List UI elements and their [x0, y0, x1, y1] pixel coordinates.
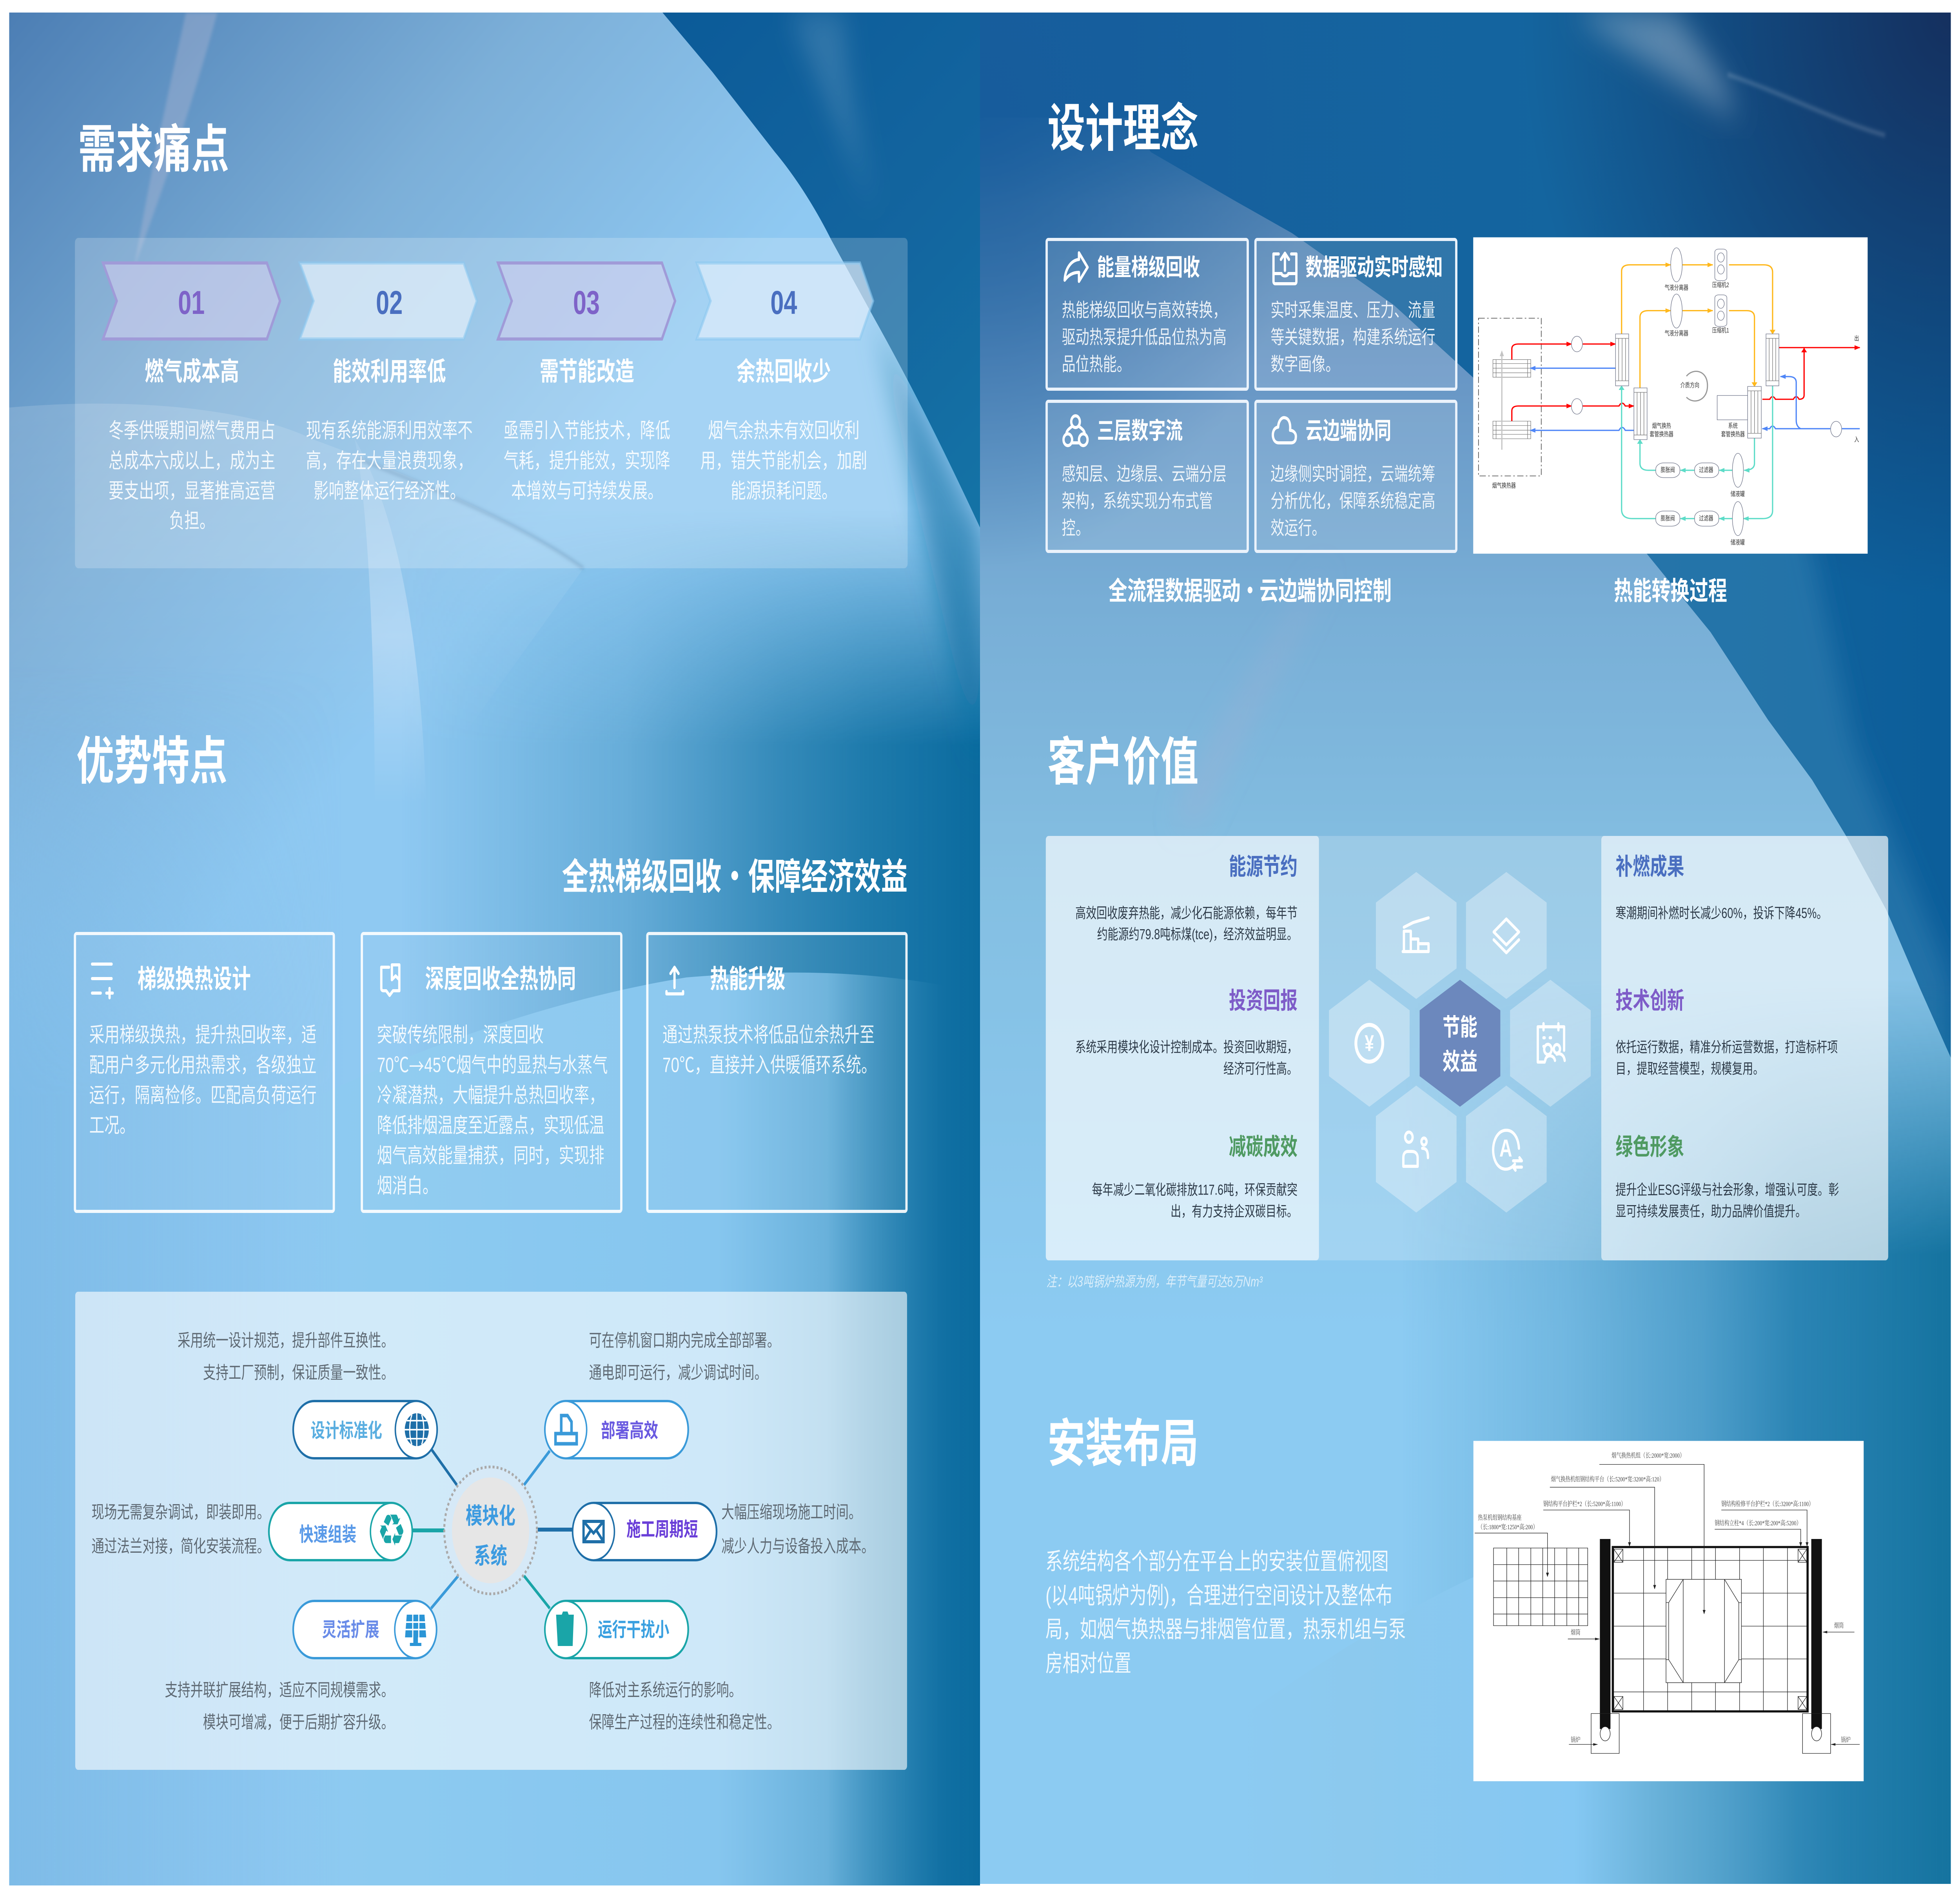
card: 三层数字流: 控。 — [1062, 517, 1089, 538]
pain point 03 — [498, 263, 675, 502]
right column: 技术创新 — [1615, 988, 1684, 1014]
pain point 02: 影响整体运行经济性。 — [314, 479, 465, 502]
node: 快速组装 — [92, 1503, 412, 1560]
node: 设计标准化: 设计标准化 — [310, 1420, 382, 1442]
icon: three layers — [1063, 416, 1087, 446]
pain point 04 — [697, 263, 873, 502]
title: 安装布局: 安装布局 — [1047, 1415, 1198, 1473]
left column: 约能源约79.8吨标煤(tce)，经济效益明显。 — [1097, 926, 1298, 943]
pain point 01: 总成本六成以上，成为主 — [109, 449, 275, 472]
card: 深度回收全热协同: 70℃→45℃烟气中的显热与水蒸气 — [377, 1050, 608, 1080]
connectors — [413, 1450, 573, 1608]
card: 数据驱动实时感知: 数字画像。 — [1270, 353, 1339, 375]
icon: document tray — [555, 1416, 577, 1444]
card: 云边端协同: 云边端协同 — [1305, 418, 1391, 444]
text block: installation: 局，如烟气换热器与排烟管位置，热泵机组与泵 — [1045, 1616, 1406, 1643]
icon: cloud — [1273, 418, 1296, 443]
diagram: installation plan view: 钢结构检修平台护栏*2（长:3200*高:1100） — [1721, 1500, 1813, 1508]
icon: inbox upload — [1274, 253, 1296, 284]
node: 设计标准化: 采用统一设计规范，提升部件互换性。 — [178, 1331, 394, 1351]
pain point 02: 02 — [376, 284, 403, 321]
right column: 目，提取经营模型，规模复用。 — [1615, 1060, 1764, 1077]
pain point 01: 负担。 — [169, 509, 215, 532]
card: 深度回收全热协同: 深度回收全热协同 — [425, 965, 576, 994]
pain point 04: 余热回收少 — [737, 357, 831, 386]
right column: 显可持续发展责任，助力品牌价值提升。 — [1615, 1203, 1806, 1220]
diagram: heat conversion process: 介质方向 — [1681, 382, 1699, 389]
left column: 高效回收废弃热能，减少化石能源依赖，每年节 — [1075, 905, 1298, 921]
pain point 02 — [300, 263, 477, 502]
node: 灵活扩展: 模块可增减，便于后期扩容升级。 — [203, 1713, 394, 1732]
panel: pain points — [75, 238, 907, 568]
pain point 04: 烟气余热未有效回收利 — [708, 419, 860, 442]
card: 能量梯级回收: 品位热能。 — [1062, 353, 1131, 375]
left column — [1046, 836, 1319, 1260]
icon: bookmark bubble — [381, 965, 399, 995]
node: 灵活扩展: 支持并联扩展结构，适应不同规模需求。 — [165, 1680, 394, 1700]
hexagon: language: A — [1499, 1135, 1512, 1162]
pain point 01: 燃气成本高 — [145, 357, 239, 386]
card: 能量梯级回收: 驱动热泵提升低品位热为高 — [1062, 326, 1227, 348]
icon: solar panel — [405, 1615, 426, 1646]
hexagon: language — [1466, 1086, 1547, 1213]
card: 深度回收全热协同: 烟消白。 — [377, 1174, 437, 1197]
diagram: heat conversion process: 烟气换热器 — [1492, 482, 1516, 489]
diagram: installation plan view: 钢结构平台护栏*2（长:5200*高:1100） — [1543, 1500, 1626, 1508]
node: 部署高效: 部署高效 — [601, 1420, 658, 1442]
subtitle: advantages: 全热梯级回收・保障经济效益 — [562, 857, 907, 897]
diagram: heat conversion process: 储液罐 — [1731, 490, 1745, 498]
diagram: installation plan view: 烟气换热机组（长:2000*宽:2000） — [1612, 1451, 1684, 1459]
icon: trash bin — [556, 1612, 574, 1646]
node: 运行干扰小 — [545, 1601, 780, 1732]
diagram: heat conversion process: 套管换热器 — [1721, 431, 1745, 438]
node: 运行干扰小: 降低对主系统运行的影响。 — [589, 1680, 742, 1700]
left column: 经济可行性高。 — [1223, 1060, 1298, 1077]
text block: installation — [1045, 1548, 1406, 1677]
card: 数据驱动实时感知 — [1256, 239, 1456, 389]
diagram: heat conversion process: 压缩机2 — [1712, 281, 1729, 289]
hexagon: center — [1420, 980, 1500, 1107]
text block: installation: 系统结构各个部分在平台上的安装位置俯视图 — [1045, 1548, 1389, 1575]
node: 设计标准化: 支持工厂预制，保证质量一致性。 — [203, 1363, 394, 1383]
diagram: heat conversion process: 出 — [1854, 335, 1859, 343]
text block: installation: (以4吨锅炉为例)，合理进行空间设计及整体布 — [1045, 1583, 1392, 1609]
card: 云边端协同: 分析优化，保障系统稳定高 — [1270, 490, 1436, 511]
card: 深度回收全热协同: 降低排烟温度至近露点，实现低温 — [377, 1113, 604, 1137]
hexagon: chart — [1376, 872, 1457, 999]
card: 能量梯级回收: 热能梯级回收与高效转换， — [1062, 299, 1227, 321]
caption: design concept: 全流程数据驱动・云边端协同控制 — [1109, 577, 1392, 606]
diagram: installation plan view: 锅炉 — [1841, 1736, 1851, 1744]
pain point 03: 需节能改造 — [540, 357, 634, 386]
pain point 03: 气耗，提升能效，实现降 — [504, 449, 670, 472]
node: 施工周期短: 大幅压缩现场施工时间。 — [721, 1503, 861, 1522]
card: 梯级换热设计: 运行，隔离检修。匹配高负荷运行 — [89, 1083, 317, 1107]
diagram: installation plan view: 烟筒 — [1571, 1628, 1581, 1636]
icon: upload — [666, 967, 683, 994]
card: 云边端协同 — [1256, 401, 1456, 551]
icon: list plus — [92, 964, 113, 998]
hexagon: people — [1376, 1086, 1457, 1213]
text block: installation: 房相对位置 — [1045, 1650, 1131, 1677]
card: 梯级换热设计: 梯级换热设计 — [138, 965, 251, 994]
node: 施工周期短: 施工周期短 — [626, 1519, 698, 1541]
pain point 02: 能效利用率低 — [333, 357, 446, 386]
panel: customer value — [1046, 836, 1888, 1260]
pain point 04: 能源损耗问题。 — [731, 479, 837, 502]
hexagon: yen: ¥ — [1365, 1030, 1374, 1056]
pain point 04: 用，错失节能机会，加剧 — [701, 449, 867, 472]
pain point 01: 01 — [178, 284, 205, 321]
diagram: heat conversion process — [1473, 237, 1867, 554]
icon: globe — [405, 1413, 429, 1446]
right column: 补燃成果 — [1615, 854, 1684, 880]
hexagon: center: 效益 — [1443, 1049, 1477, 1075]
diagram: heat conversion process: 膨胀阀 — [1661, 515, 1675, 522]
node: 灵活扩展 — [165, 1601, 437, 1732]
card: 热能升级 — [647, 934, 906, 1211]
hexagon: center: 节能 — [1443, 1014, 1477, 1041]
hexagon: yen — [1329, 980, 1410, 1107]
card: 数据驱动实时感知: 数据驱动实时感知 — [1305, 254, 1443, 281]
diagram: heat conversion process: 烟气换热 — [1652, 422, 1671, 430]
node: 部署高效 — [545, 1331, 780, 1458]
card: 梯级换热设计: 配用户多元化用热需求，各级独立 — [89, 1053, 317, 1077]
right column: 绿色形象 — [1615, 1134, 1684, 1160]
footnote: 注：以3吨锅炉热源为例，年节气量可达6万Nm³ — [1046, 1273, 1263, 1290]
icon: share arrow — [1065, 253, 1087, 281]
right column: 依托运行数据，精准分析运营数据，打造标杆项 — [1615, 1039, 1838, 1055]
left column: 每年减少二氧化碳排放117.6吨，环保贡献突 — [1092, 1182, 1298, 1198]
node: 部署高效: 可在停机窗口期内完成全部部署。 — [589, 1331, 780, 1351]
diagram: heat conversion process: 气液分离器 — [1664, 284, 1688, 292]
node: 设计标准化 — [178, 1331, 437, 1458]
left column: 系统采用模块化设计控制成本。投资回收期短， — [1075, 1039, 1298, 1055]
card: 梯级换热设计 — [75, 934, 334, 1211]
pain point 02: 高，存在大量浪费现象， — [306, 449, 473, 472]
diagram: heat conversion process: 储液罐 — [1731, 539, 1745, 546]
card: 数据驱动实时感知: 实时采集温度、压力、流量 — [1270, 299, 1436, 321]
diagram: installation plan view: （长:1800*宽:1250*高:200） — [1478, 1523, 1538, 1531]
card: 深度回收全热协同: 烟气高效能量捕获，同时，实现排 — [377, 1144, 604, 1167]
card: 数据驱动实时感知: 等关键数据，构建系统运行 — [1270, 326, 1436, 348]
card: 三层数字流: 三层数字流 — [1097, 418, 1183, 444]
diagram: heat conversion process: 过滤器 — [1699, 515, 1713, 522]
card: 能量梯级回收 — [1047, 239, 1248, 389]
title: 客户价值: 客户价值 — [1047, 733, 1198, 791]
card: 三层数字流: 架构，系统实现分布式管 — [1062, 490, 1213, 511]
title: 设计理念: 设计理念 — [1047, 100, 1198, 158]
diagram: installation plan view: 钢结构立柱*4（长:200*宽:200*高:5200） — [1715, 1519, 1801, 1527]
diagram: installation plan view — [1474, 1441, 1864, 1781]
hexagon: building people — [1510, 980, 1591, 1107]
card: 深度回收全热协同: 突破传统限制，深度回收 — [377, 1023, 544, 1046]
node: 施工周期短: 减少人力与设备投入成本。 — [721, 1537, 874, 1556]
diagram: installation plan view: 烟筒 — [1834, 1621, 1844, 1630]
caption: heat conversion: 热能转换过程 — [1614, 577, 1727, 606]
card: 三层数字流 — [1047, 401, 1248, 551]
pain point 03: 03 — [573, 284, 600, 321]
card: 梯级换热设计: 采用梯级换热，提升热回收率，适 — [89, 1023, 317, 1046]
diagram: heat conversion process: 膨胀阀 — [1661, 466, 1675, 474]
card: 热能升级: 热能升级 — [710, 965, 786, 994]
card: 热能升级: 通过热泵技术将低品位余热升至 — [662, 1023, 875, 1046]
node: 运行干扰小: 运行干扰小 — [598, 1619, 670, 1641]
pain point 04: 04 — [770, 284, 797, 321]
pain point 02: 现有系统能源利用效率不 — [306, 419, 473, 442]
icon: envelope — [584, 1521, 604, 1542]
diagram: heat conversion process: 过滤器 — [1699, 466, 1713, 474]
left column: 投资回报 — [1229, 988, 1298, 1014]
card: 深度回收全热协同 — [362, 934, 621, 1211]
right column: 提升企业ESG评级与社会形象，增强认可度。彰 — [1615, 1182, 1839, 1198]
diagram: installation plan view: 热泵机组钢结构基座 — [1478, 1514, 1522, 1522]
card: 云边端协同: 效运行。 — [1270, 517, 1325, 538]
pain point 03: 本增效与可持续发展。 — [511, 479, 663, 502]
card: 能量梯级回收: 能量梯级回收 — [1097, 254, 1200, 281]
title: 优势特点: 优势特点 — [76, 732, 227, 790]
panel: modular system — [75, 1292, 907, 1770]
hexagon: layers — [1466, 872, 1547, 999]
node: 部署高效: 通电即可运行，减少调试时间。 — [589, 1363, 767, 1383]
card: 热能升级: 70℃，直接并入供暖循环系统。 — [662, 1053, 877, 1077]
left column: 出，有力支持企双碳目标。 — [1171, 1203, 1298, 1220]
diagram: heat conversion process: 气液分离器 — [1664, 330, 1688, 337]
left column: 减碳成效 — [1229, 1134, 1298, 1160]
card: 梯级换热设计: 工况。 — [89, 1113, 135, 1137]
title: 需求痛点: 需求痛点 — [78, 121, 229, 179]
pain point 01: 冬季供暖期间燃气费用占 — [109, 419, 275, 442]
diagram: heat conversion process: 套管换热器 — [1650, 431, 1673, 438]
node: 快速组装: 现场无需复杂调试，即装即用。 — [92, 1503, 270, 1522]
diagram: heat conversion process: 压缩机1 — [1712, 327, 1729, 334]
node: 施工周期短 — [573, 1503, 874, 1560]
pain point 01 — [103, 263, 280, 532]
center node: 模块化 — [466, 1503, 515, 1529]
center node — [444, 1467, 537, 1594]
node: 运行干扰小: 保障生产过程的连续性和稳定性。 — [589, 1713, 780, 1732]
center node: 系统 — [474, 1543, 507, 1569]
card: 云边端协同: 边缘侧实时调控，云端统筹 — [1270, 463, 1436, 484]
right column: 寒潮期间补燃时长减少60%，投诉下降45%。 — [1615, 905, 1827, 921]
node: 灵活扩展: 灵活扩展 — [322, 1619, 379, 1641]
pain point 03: 亟需引入节能技术，降低 — [504, 419, 670, 442]
left column: 能源节约 — [1229, 854, 1298, 880]
card: 三层数字流: 感知层、边缘层、云端分层 — [1062, 463, 1227, 484]
right column — [1601, 836, 1888, 1260]
diagram: installation plan view: 烟气换热机组钢结构平台（长:5200*宽:3200*高:120） — [1551, 1475, 1664, 1483]
node: 快速组装: 快速组装 — [299, 1524, 356, 1546]
pain point 01: 要支出项，显著推高运营 — [109, 479, 275, 502]
diagram: heat conversion process: 系统 — [1728, 422, 1738, 430]
icon: recycle: ♻ — [377, 1505, 406, 1556]
diagram: heat conversion process: 入 — [1854, 436, 1859, 443]
node: 快速组装: 通过法兰对接，简化安装流程。 — [92, 1537, 270, 1556]
card: 深度回收全热协同: 冷凝潜热，大幅提升总热回收率， — [377, 1083, 604, 1107]
diagram: installation plan view: 锅炉 — [1571, 1736, 1581, 1744]
